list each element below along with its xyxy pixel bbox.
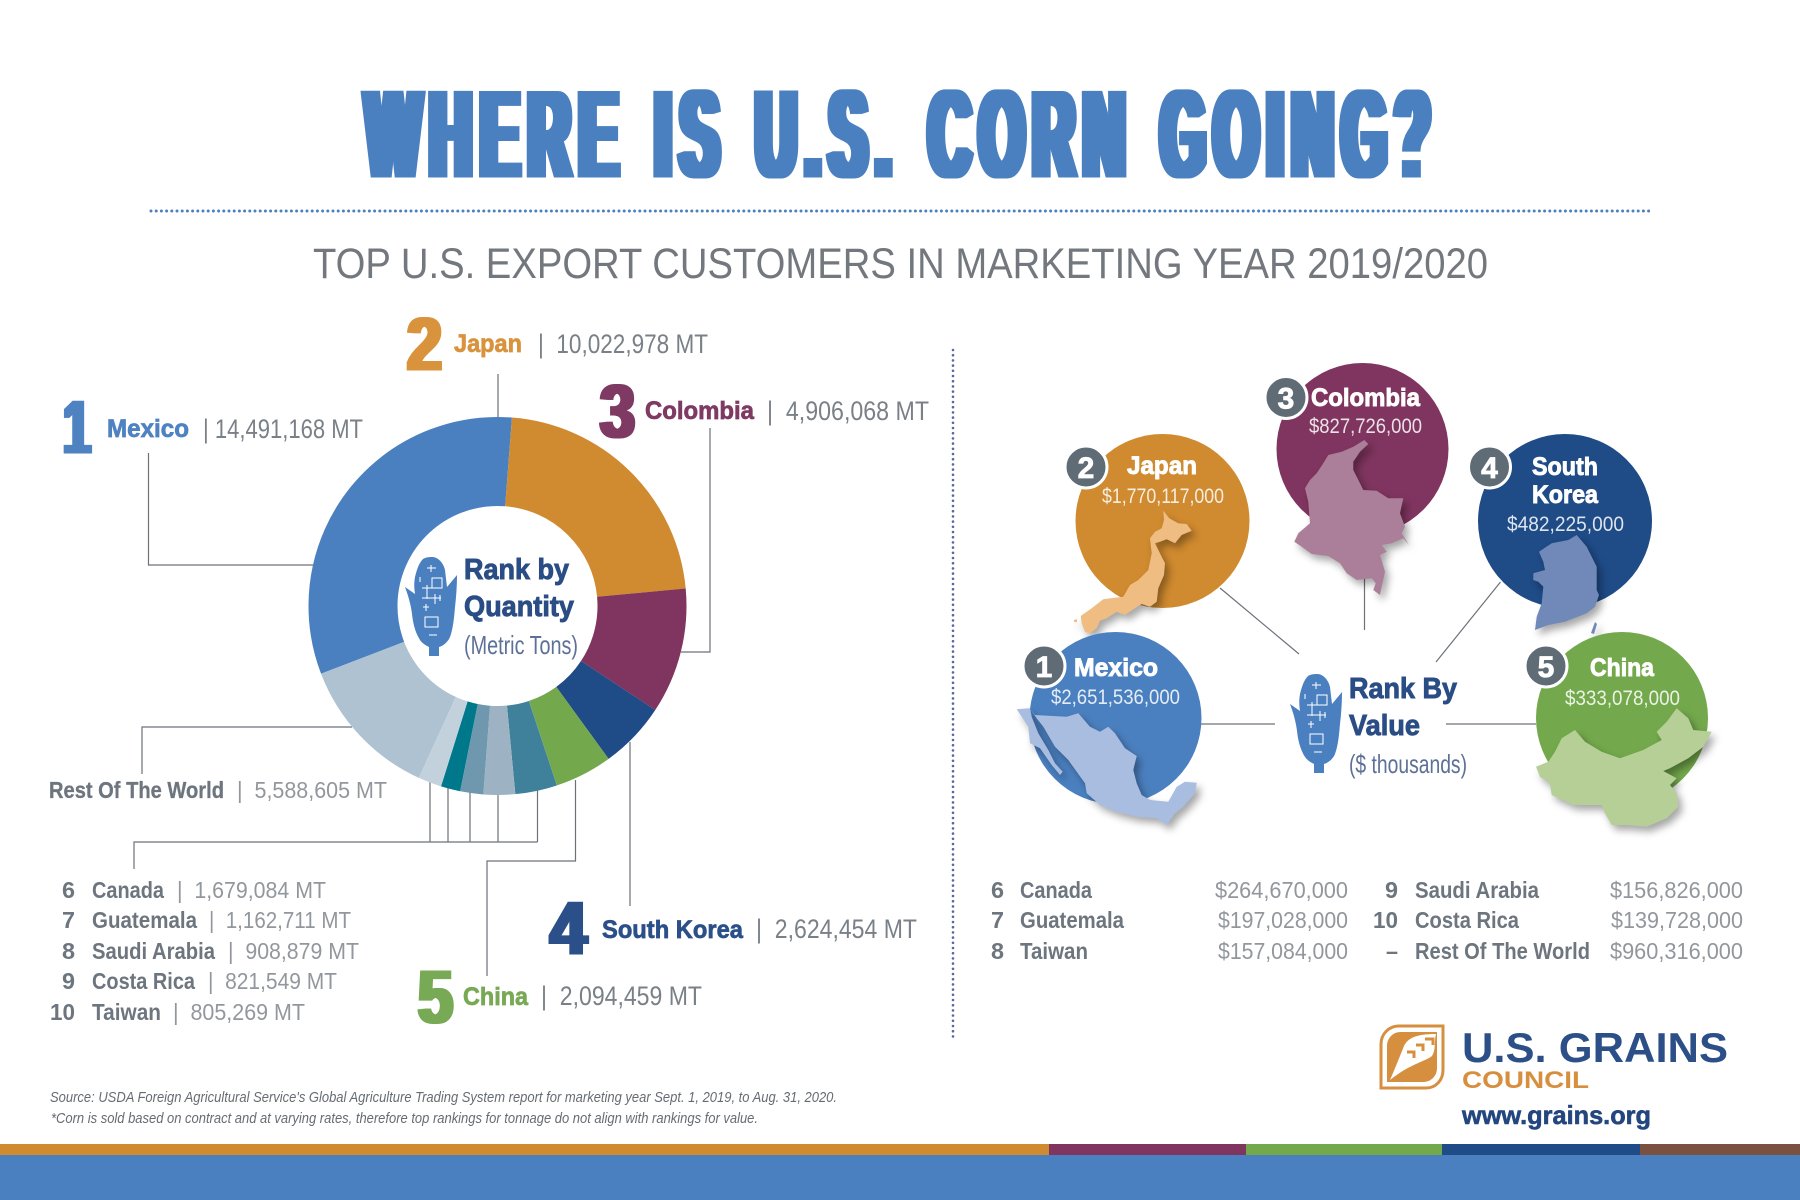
ranked list: 6 to 8: 8: [991, 938, 1004, 964]
bubble: China: 5: [1538, 651, 1554, 684]
label: rest of the world: | 5,588,605 MT: [237, 777, 387, 803]
source note: Source: USDA Foreign Agricultural Service's Global Agriculture Trading System report for marketing year Sept. 1, 2019, to Aug. 31, 2020.: [50, 1090, 837, 1106]
connector lines: [1201, 577, 1536, 724]
map: Japan: [1074, 511, 1192, 633]
ranked list: 6 to 10: Taiwan: [92, 999, 161, 1025]
ranked list: 6 to 10: 7: [62, 907, 75, 933]
ranked list: 6 to 10: 8: [62, 938, 75, 964]
bubble: Mexico: [1017, 632, 1202, 825]
ranked list: 6 to 10: Costa Rica: [92, 968, 195, 994]
label: rest of the world: [49, 777, 387, 803]
bubble: South Korea: [1468, 434, 1652, 634]
ranked list: 6 to 8: 7: [991, 907, 1004, 933]
bubble: Colombia: $827,726,000: [1309, 414, 1422, 438]
bubble: South Korea: $482,225,000: [1507, 512, 1624, 536]
label: 4 South Korea: South Korea: [602, 916, 744, 944]
wordmark: council: COUNCIL: [1462, 1067, 1589, 1094]
ranked list: 6 to 10: 6: [62, 877, 75, 903]
ranked list: 6 to 8: Guatemala: [1020, 907, 1124, 933]
bubble: Japan: Japan: [1127, 452, 1197, 480]
website: www.grains.org: [1461, 1100, 1651, 1130]
source note: [50, 1090, 837, 1127]
bubble: Japan: 2: [1078, 452, 1094, 485]
icon: leaf logo: [1381, 1026, 1443, 1088]
ranked list: 6 to 10: | 821,549 MT: [208, 968, 337, 994]
subtitle: TOP U.S. EXPORT CUSTOMERS IN MARKETING YEAR 2019/2020: [313, 240, 1488, 288]
title: U.S.: [756, 66, 900, 204]
bubble: South Korea: 4: [1481, 452, 1498, 485]
label: 1 Mexico: [63, 385, 363, 469]
panel: rank by value: [991, 363, 1743, 964]
footer color bars: [0, 1144, 1800, 1200]
ranked list: 6 to 10: | 908,879 MT: [228, 938, 359, 964]
text: GOING?: [1161, 66, 1439, 204]
ranked list: 6 to 8: Taiwan: [1020, 938, 1088, 964]
bubble: Mexico: $2,651,536,000: [1051, 685, 1180, 709]
title: WHERE: [366, 66, 627, 204]
ranked list: 6 to 8: $197,028,000: [1218, 907, 1348, 933]
leader lines: [134, 374, 710, 976]
bubble: South Korea: South: [1532, 453, 1598, 481]
center label: rank by value: ($ thousands): [1349, 749, 1467, 779]
title: [366, 66, 1439, 204]
map: South Korea: [1533, 535, 1599, 634]
ranked list: 6 to 10: Saudi Arabia: [92, 938, 215, 964]
bubble: China: [1525, 632, 1712, 827]
bubble: Colombia: 3: [1278, 382, 1294, 416]
bubble: China: China: [1590, 654, 1655, 682]
bubble: South Korea: Korea: [1532, 481, 1599, 509]
source note: *Corn is sold based on contract and at varying rates, therefore top rankings for tonnage do not align with rankings for value.: [51, 1111, 758, 1127]
label: 4 South Korea: | 2,624,454 MT: [756, 914, 917, 944]
label: 3 Colombia: | 4,906,068 MT: [767, 396, 929, 426]
ranked list: 9, 10, rest of the world: Rest Of The World: [1415, 938, 1590, 964]
icon: corn: [405, 557, 457, 656]
label: 2 Japan: [407, 302, 708, 386]
ranked list: 6 to 10: Canada: [92, 877, 164, 903]
center label: rank by quantity: [464, 554, 578, 660]
label: 1 Mexico: 1: [63, 385, 91, 469]
ranked list: 9, 10, rest of the world: $156,826,000: [1610, 877, 1743, 903]
center label: rank by value: [1349, 673, 1467, 779]
label: 3 Colombia: Colombia: [645, 397, 755, 425]
logo: U.S. Grains Council: [1381, 1024, 1728, 1130]
label: 2 Japan: | 10,022,978 MT: [538, 329, 708, 359]
label: 3 Colombia: [600, 369, 929, 453]
center label: rank by quantity: (Metric Tons): [464, 630, 578, 660]
label: 4 South Korea: [550, 886, 917, 970]
ranked list: 6 to 8: 6: [991, 877, 1004, 903]
wordmark: U.S. GRAINS: [1462, 1024, 1728, 1071]
ranked list: 6 to 8: Canada: [1020, 877, 1092, 903]
label: 1 Mexico: Mexico: [107, 415, 189, 443]
ranked list: 9, 10, rest of the world: Costa Rica: [1415, 907, 1519, 933]
icon: corn: [1290, 674, 1342, 773]
bubble: Japan: [1065, 434, 1250, 633]
center label: rank by value: Rank By: [1349, 673, 1457, 705]
ranked list: 9, 10, rest of the world: –: [1386, 938, 1398, 964]
bubble: Japan: $1,770,117,000: [1102, 484, 1224, 508]
bubble: Colombia: Colombia: [1311, 384, 1421, 412]
ranked list: 6 to 10: [50, 877, 359, 1025]
map: Colombia: [1294, 440, 1409, 595]
ranked list: 9, 10, rest of the world: [1373, 877, 1743, 964]
label: 4 South Korea: 4: [550, 886, 587, 970]
label: rest of the world: Rest Of The World: [49, 777, 224, 803]
label: 3 Colombia: 3: [600, 369, 635, 453]
ranked list: 6 to 8: $264,670,000: [1215, 877, 1348, 903]
center label: rank by quantity: Quantity: [464, 591, 574, 623]
ranked list: 6 to 10: 9: [62, 968, 75, 994]
ranked list: 6 to 10: Guatemala: [92, 907, 197, 933]
ranked list: 9, 10, rest of the world: $960,316,000: [1610, 938, 1743, 964]
label: 5 China: [418, 955, 702, 1039]
ranked list: 9, 10, rest of the world: 10: [1373, 907, 1398, 933]
label: 5 China: 5: [418, 955, 453, 1039]
ranked list: 6 to 8: $157,084,000: [1218, 938, 1348, 964]
ranked list: 6 to 10: 10: [50, 999, 75, 1025]
donut chart: [296, 404, 699, 808]
ranked list: 6 to 10: | 1,679,084 MT: [177, 877, 326, 903]
center label: rank by quantity: Rank by: [464, 554, 569, 586]
ranked list: 9, 10, rest of the world: 9: [1385, 877, 1398, 903]
label: 1 Mexico: | 14,491,168 MT: [203, 414, 363, 444]
ranked list: 6 to 10: | 1,162,711 MT: [209, 907, 351, 933]
ranked list: 6 to 10: | 805,269 MT: [173, 999, 305, 1025]
bubble: Mexico: 1: [1036, 651, 1052, 684]
map: Mexico: [1017, 708, 1197, 825]
title: CORN: [929, 66, 1134, 204]
map: China: [1536, 708, 1712, 827]
label: 2 Japan: Japan: [454, 330, 522, 358]
ranked list: 9, 10, rest of the world: Saudi Arabia: [1415, 877, 1539, 903]
label: 5 China: | 2,094,459 MT: [541, 981, 702, 1011]
ranked list: 9, 10, rest of the world: $139,728,000: [1611, 907, 1743, 933]
bubble: Mexico: Mexico: [1074, 654, 1158, 682]
bubble: Colombia: [1265, 363, 1448, 595]
bubble: China: $333,078,000: [1565, 686, 1680, 710]
ranked list: 6 to 8: [991, 877, 1348, 964]
title: IS: [655, 66, 728, 204]
center label: rank by value: Value: [1349, 710, 1420, 742]
label: 2 Japan: 2: [407, 302, 442, 386]
panel: rank by quantity: [49, 302, 929, 1039]
label: 5 China: China: [463, 983, 529, 1011]
